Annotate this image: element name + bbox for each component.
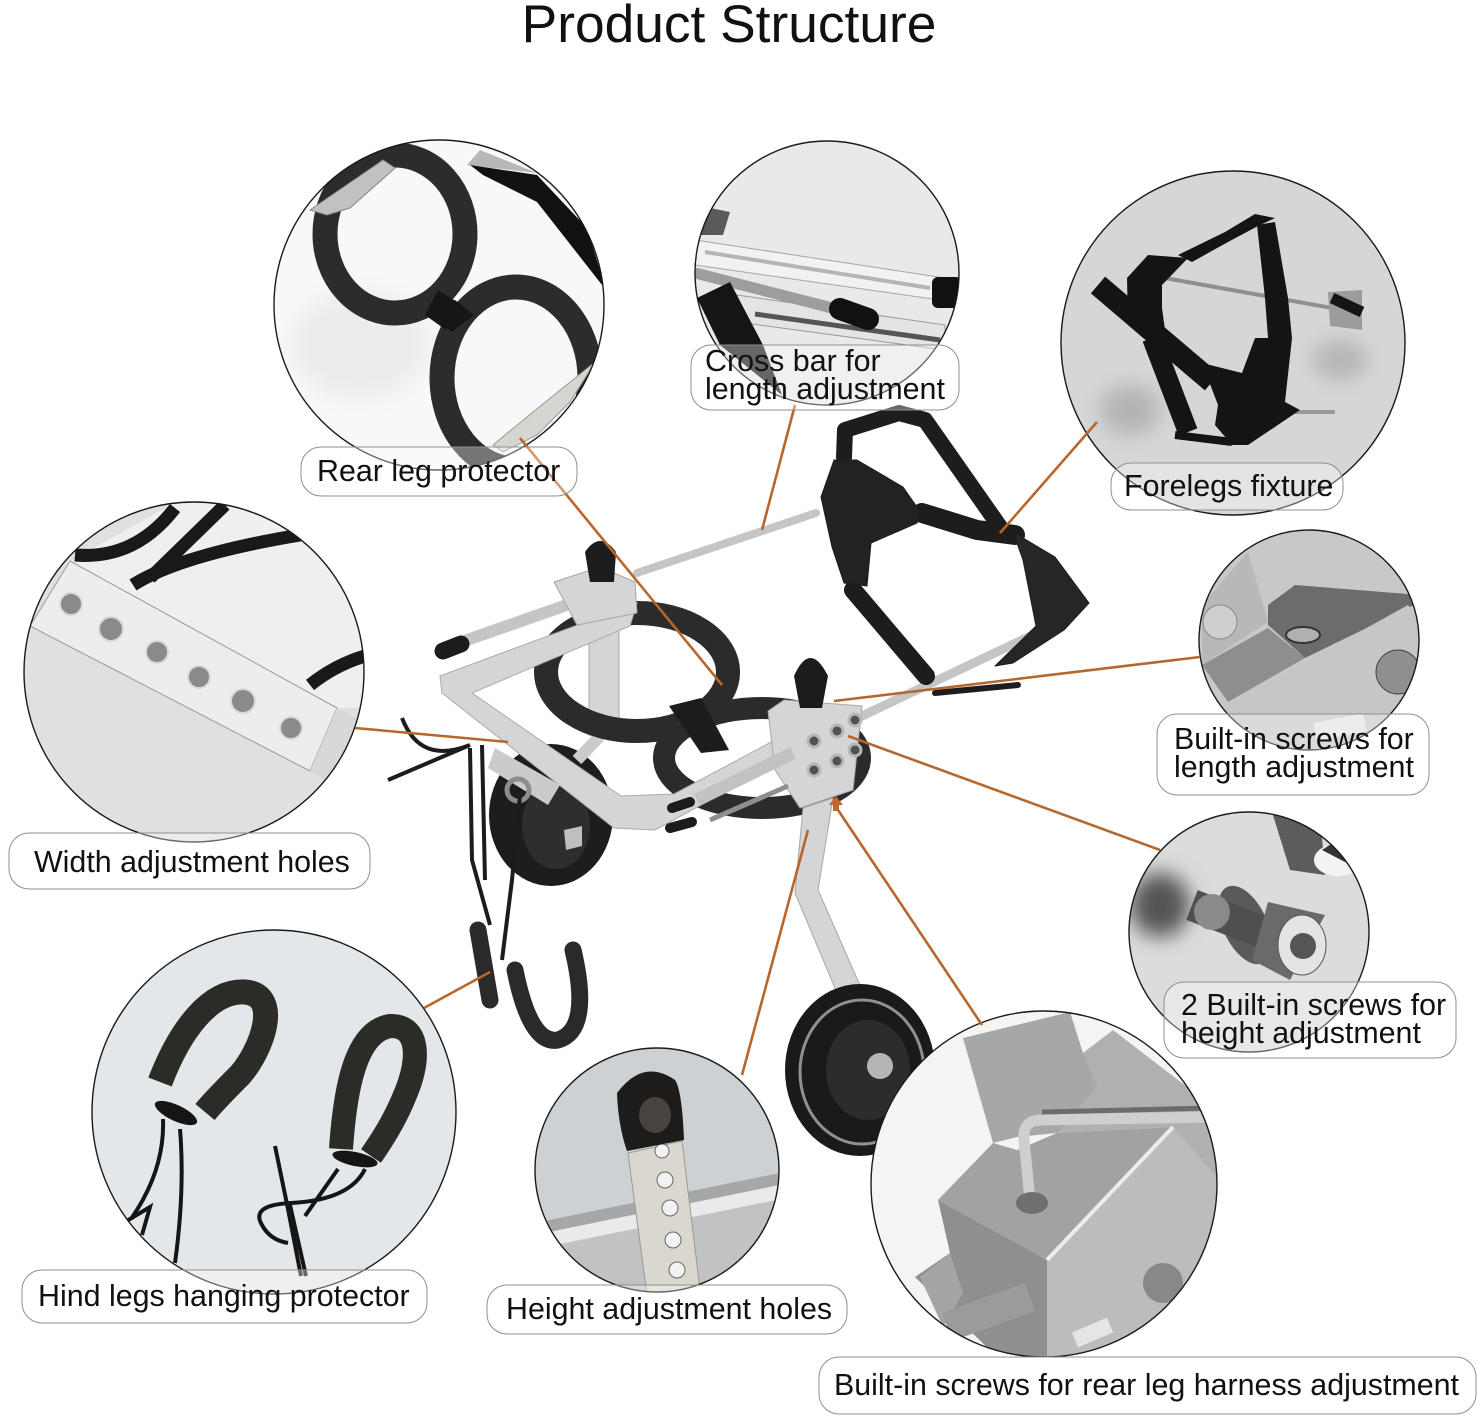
- line: hind protector: [424, 972, 490, 1008]
- label: built-in screws for length adjustment: length adjustment: [1174, 750, 1414, 784]
- circle outline: [24, 502, 364, 842]
- circle outline: [274, 140, 604, 470]
- front block: [768, 700, 862, 808]
- panel: cross bar: [695, 141, 962, 406]
- front wheel: [785, 984, 935, 1156]
- label: height adjustment holes: Height adjustment holes: [506, 1292, 832, 1326]
- rear knob: [585, 541, 616, 582]
- panel: forelegs fixture: [1061, 171, 1405, 515]
- label: cross bar for length adjustment: length adjustment: [705, 372, 945, 406]
- harness: [821, 413, 1089, 693]
- ring strap: [669, 698, 729, 753]
- U-shaped frame: [440, 603, 784, 830]
- rear leg ring: [546, 613, 728, 731]
- rear block: [554, 567, 637, 625]
- rear wheel: [489, 736, 613, 886]
- line: height holes: [742, 830, 808, 1075]
- label: built-in screws for length adjustment: Built-in screws for: [1174, 722, 1414, 756]
- harness side pad: [995, 532, 1089, 666]
- cross bar photo: [695, 141, 962, 406]
- label: 2 built-in screws for height adjustment: [1164, 982, 1456, 1058]
- width holes photo: [24, 500, 370, 843]
- hanging loops: [478, 930, 580, 1040]
- label: cross bar for length adjustment: [691, 344, 959, 410]
- label: 2 built-in screws for height adjustment: height adjustment: [1181, 1016, 1421, 1050]
- line: harness screws: [838, 810, 982, 1025]
- line: rear leg protector: [520, 438, 722, 685]
- line: height screws: [848, 736, 1160, 850]
- label: hind legs hanging protector: Hind legs hanging protector: [38, 1279, 410, 1313]
- leader lines: [355, 405, 1200, 1075]
- label: height adjustment holes: [487, 1285, 847, 1334]
- cable: [710, 786, 788, 820]
- rear rod tip: [443, 644, 461, 651]
- harness chest pad: [821, 460, 919, 586]
- length screws photo: [1199, 530, 1422, 755]
- circle outline: [535, 1048, 779, 1292]
- label: width adjustment holes: Width adjustment holes: [34, 845, 350, 879]
- long side rods: [467, 513, 1064, 716]
- harness screws photo: [871, 1011, 1217, 1360]
- label: 2 built-in screws for height adjustment: 2 Built-in screws for: [1181, 988, 1446, 1022]
- circle outline: [1061, 171, 1405, 515]
- panel: height screws: [1129, 812, 1369, 1052]
- line: cross bar: [762, 405, 795, 530]
- panel: length adjustment screws: [1199, 530, 1422, 755]
- front leg ring: [664, 708, 860, 808]
- circle outline: [871, 1011, 1217, 1357]
- line: width holes: [355, 728, 508, 742]
- label: built-in screws for length adjustment: [1157, 714, 1429, 795]
- front block screws: [808, 714, 861, 776]
- lower tube: [697, 753, 793, 800]
- lower tube tips: [670, 802, 692, 828]
- label: hind legs hanging protector: [22, 1270, 427, 1323]
- circle outline: [1199, 530, 1419, 750]
- panel: height adjustment holes: [535, 1048, 785, 1295]
- label: built-in screws for rear leg harness adjustment: Built-in screws for rear leg harness adjustment: [834, 1368, 1460, 1402]
- hanging cords: [388, 718, 520, 960]
- front leg: [795, 798, 862, 1000]
- arrow head: [829, 796, 843, 811]
- panel: rear leg protector: [274, 140, 606, 471]
- rear leg protector photo: [274, 140, 606, 471]
- circle outline: [92, 930, 456, 1294]
- line: forelegs: [1000, 422, 1097, 533]
- rear bracket with rings: [488, 748, 560, 805]
- label: rear leg protector: Rear leg protector: [317, 454, 560, 488]
- label: forelegs fixture: [1111, 463, 1343, 510]
- label: cross bar for length adjustment: Cross bar for: [705, 344, 881, 378]
- height screws photo: [1129, 812, 1369, 1052]
- height holes photo: [535, 1048, 785, 1295]
- hanging protector photo: [92, 930, 456, 1294]
- panel: rear harness screws: [871, 1011, 1217, 1360]
- circle outline: [695, 141, 959, 405]
- forelegs harness photo: [1061, 171, 1405, 515]
- front knob: [794, 658, 828, 708]
- rear post: [589, 630, 619, 735]
- label: rear leg protector: [301, 447, 577, 496]
- panel: width adjustment holes: [24, 500, 370, 843]
- line: length screws: [834, 657, 1200, 701]
- label: forelegs fixture: Forelegs fixture: [1124, 469, 1333, 503]
- wheelchair illustration: [388, 413, 1089, 1156]
- label: width adjustment holes: [9, 833, 370, 889]
- label: built-in screws for rear leg harness adjustment: [819, 1357, 1476, 1414]
- panel: hind legs protector: [92, 930, 456, 1294]
- circle outline: [1129, 812, 1369, 1052]
